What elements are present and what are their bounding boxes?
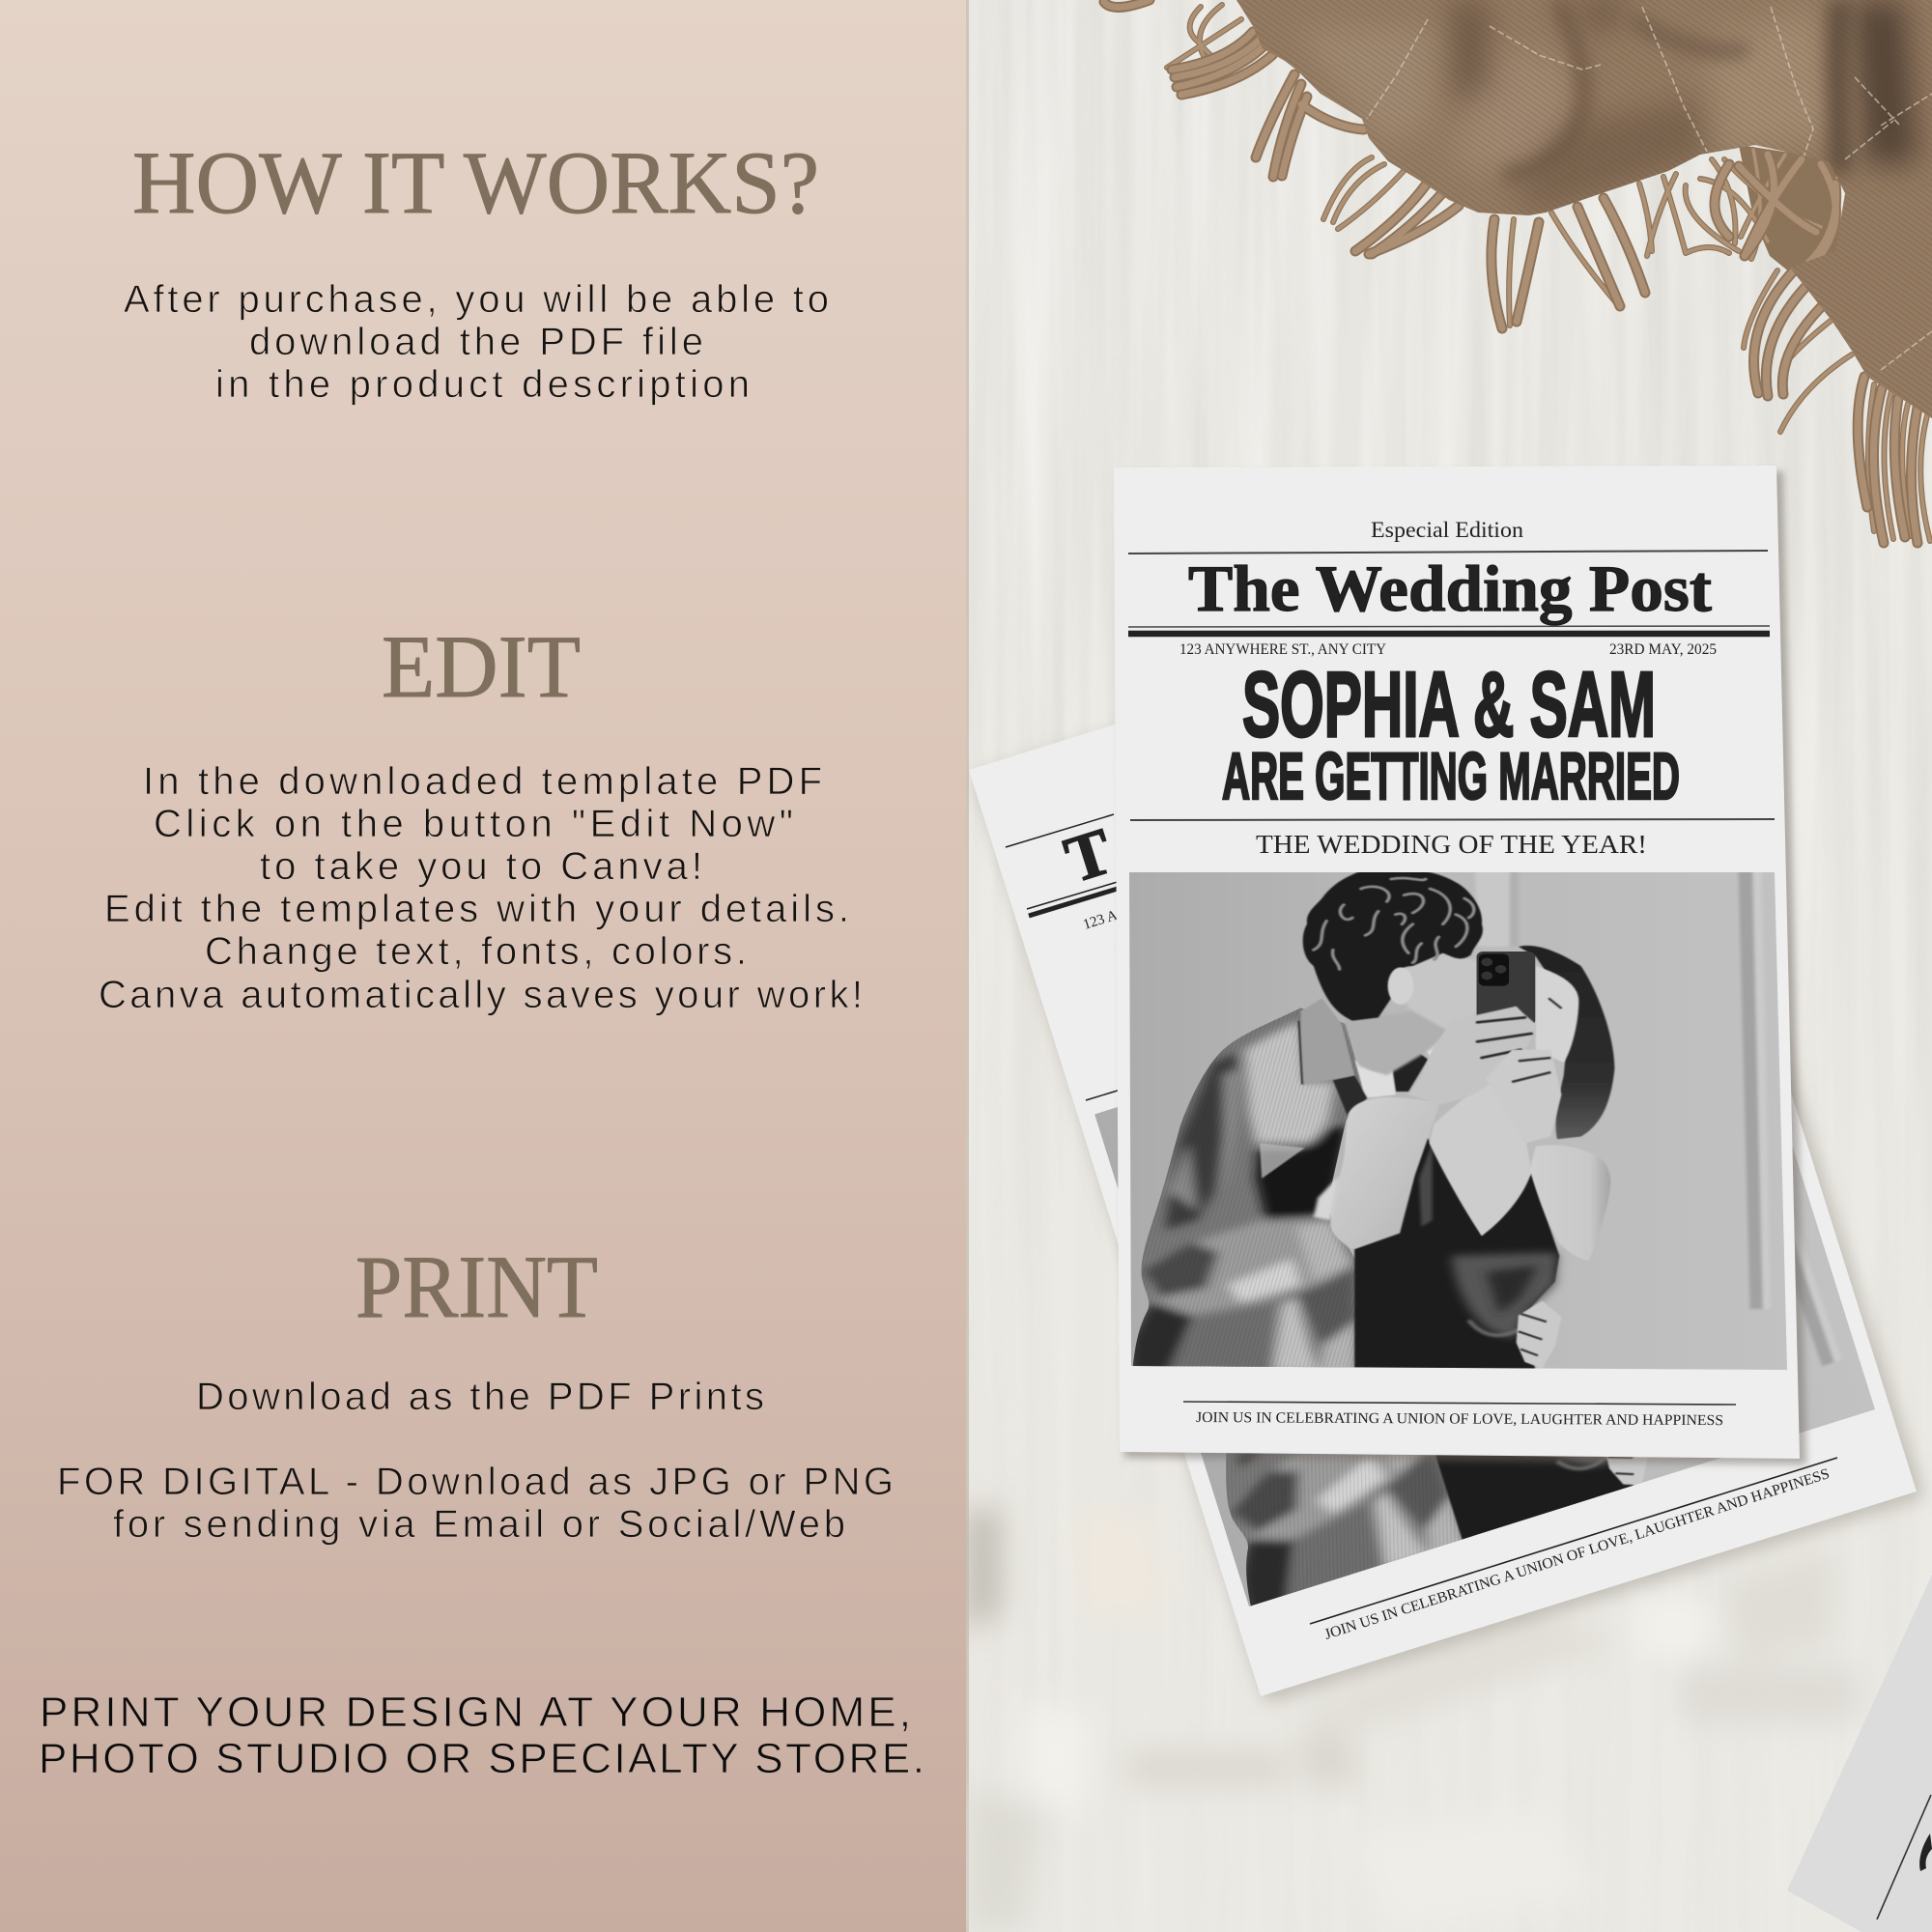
panel: product mockup photo — [966, 0, 1932, 1932]
text block: after purchase: download the PDF file — [249, 321, 703, 363]
front photo — [1129, 872, 1787, 1370]
heading: edit: EDIT — [382, 617, 581, 716]
shawl body — [1236, 0, 1932, 418]
back masthead: T — [1057, 813, 1121, 896]
text block: print options: for sending via Email or Social/Web — [113, 1503, 845, 1546]
back footer text: JOIN US IN CELEBRATING A UNION OF LOVE, LAUGHTER AND HAPPINESS — [1322, 1465, 1832, 1643]
text block: edit steps: Canva automatically saves your work! — [99, 974, 863, 1016]
text block: after purchase: After purchase, you will be able to — [124, 278, 829, 321]
text block: print your design: PRINT YOUR DESIGN AT YOUR HOME, — [40, 1689, 911, 1736]
text block: edit steps: Click on the button "Edit Now" — [154, 803, 793, 845]
text block: print options: FOR DIGITAL - Download as JPG or PNG — [57, 1461, 894, 1503]
text block: edit steps: Edit the templates with your details. — [104, 888, 849, 930]
linen cloth background — [966, 0, 1932, 1932]
headline names: SOPHIA & SAM — [1242, 653, 1656, 756]
back newspaper copy — [969, 724, 1928, 1708]
peach panel background — [0, 0, 966, 1932]
address: 123 ANYWHERE ST., ANY CITY — [1179, 641, 1386, 658]
text block: print options — [57, 1376, 894, 1546]
back rule — [1310, 1458, 1837, 1624]
edition label: Especial Edition — [1371, 518, 1524, 542]
text block: edit steps: In the downloaded template PDF — [143, 760, 822, 803]
shawl with fringe — [1104, 0, 1932, 543]
footer text: JOIN US IN CELEBRATING A UNION OF LOVE, LAUGHTER AND HAPPINESS — [1196, 1409, 1723, 1429]
bottom right card corner — [1787, 1575, 1932, 1932]
tagline: THE WEDDING OF THE YEAR! — [1256, 829, 1647, 859]
text block: after purchase: in the product description — [215, 363, 750, 406]
fringe tangle shade — [1739, 145, 1840, 272]
text block: after purchase — [124, 278, 829, 406]
text block: edit steps: Change text, fonts, colors. — [205, 930, 747, 973]
front newspaper — [1114, 466, 1810, 1468]
text block: edit steps: to take you to Canva! — [260, 845, 702, 888]
back newspaper copy: 123 A — [1081, 908, 1120, 933]
back photo — [1094, 1107, 1875, 1606]
heading: print: PRINT — [355, 1237, 598, 1336]
text block: print options: Download as the PDF Prints — [196, 1376, 764, 1418]
panel: instructions — [0, 0, 966, 1932]
text block: print your design — [39, 1689, 924, 1782]
fringe strands — [1104, 0, 1930, 543]
heading: how it works: HOW IT WORKS? — [132, 133, 819, 232]
masthead: The Wedding Post — [1188, 552, 1712, 625]
text block: edit steps — [99, 760, 863, 1016]
date: 23RD MAY, 2025 — [1609, 641, 1717, 658]
text block: print your design: PHOTO STUDIO OR SPECIALTY STORE. — [39, 1735, 924, 1782]
